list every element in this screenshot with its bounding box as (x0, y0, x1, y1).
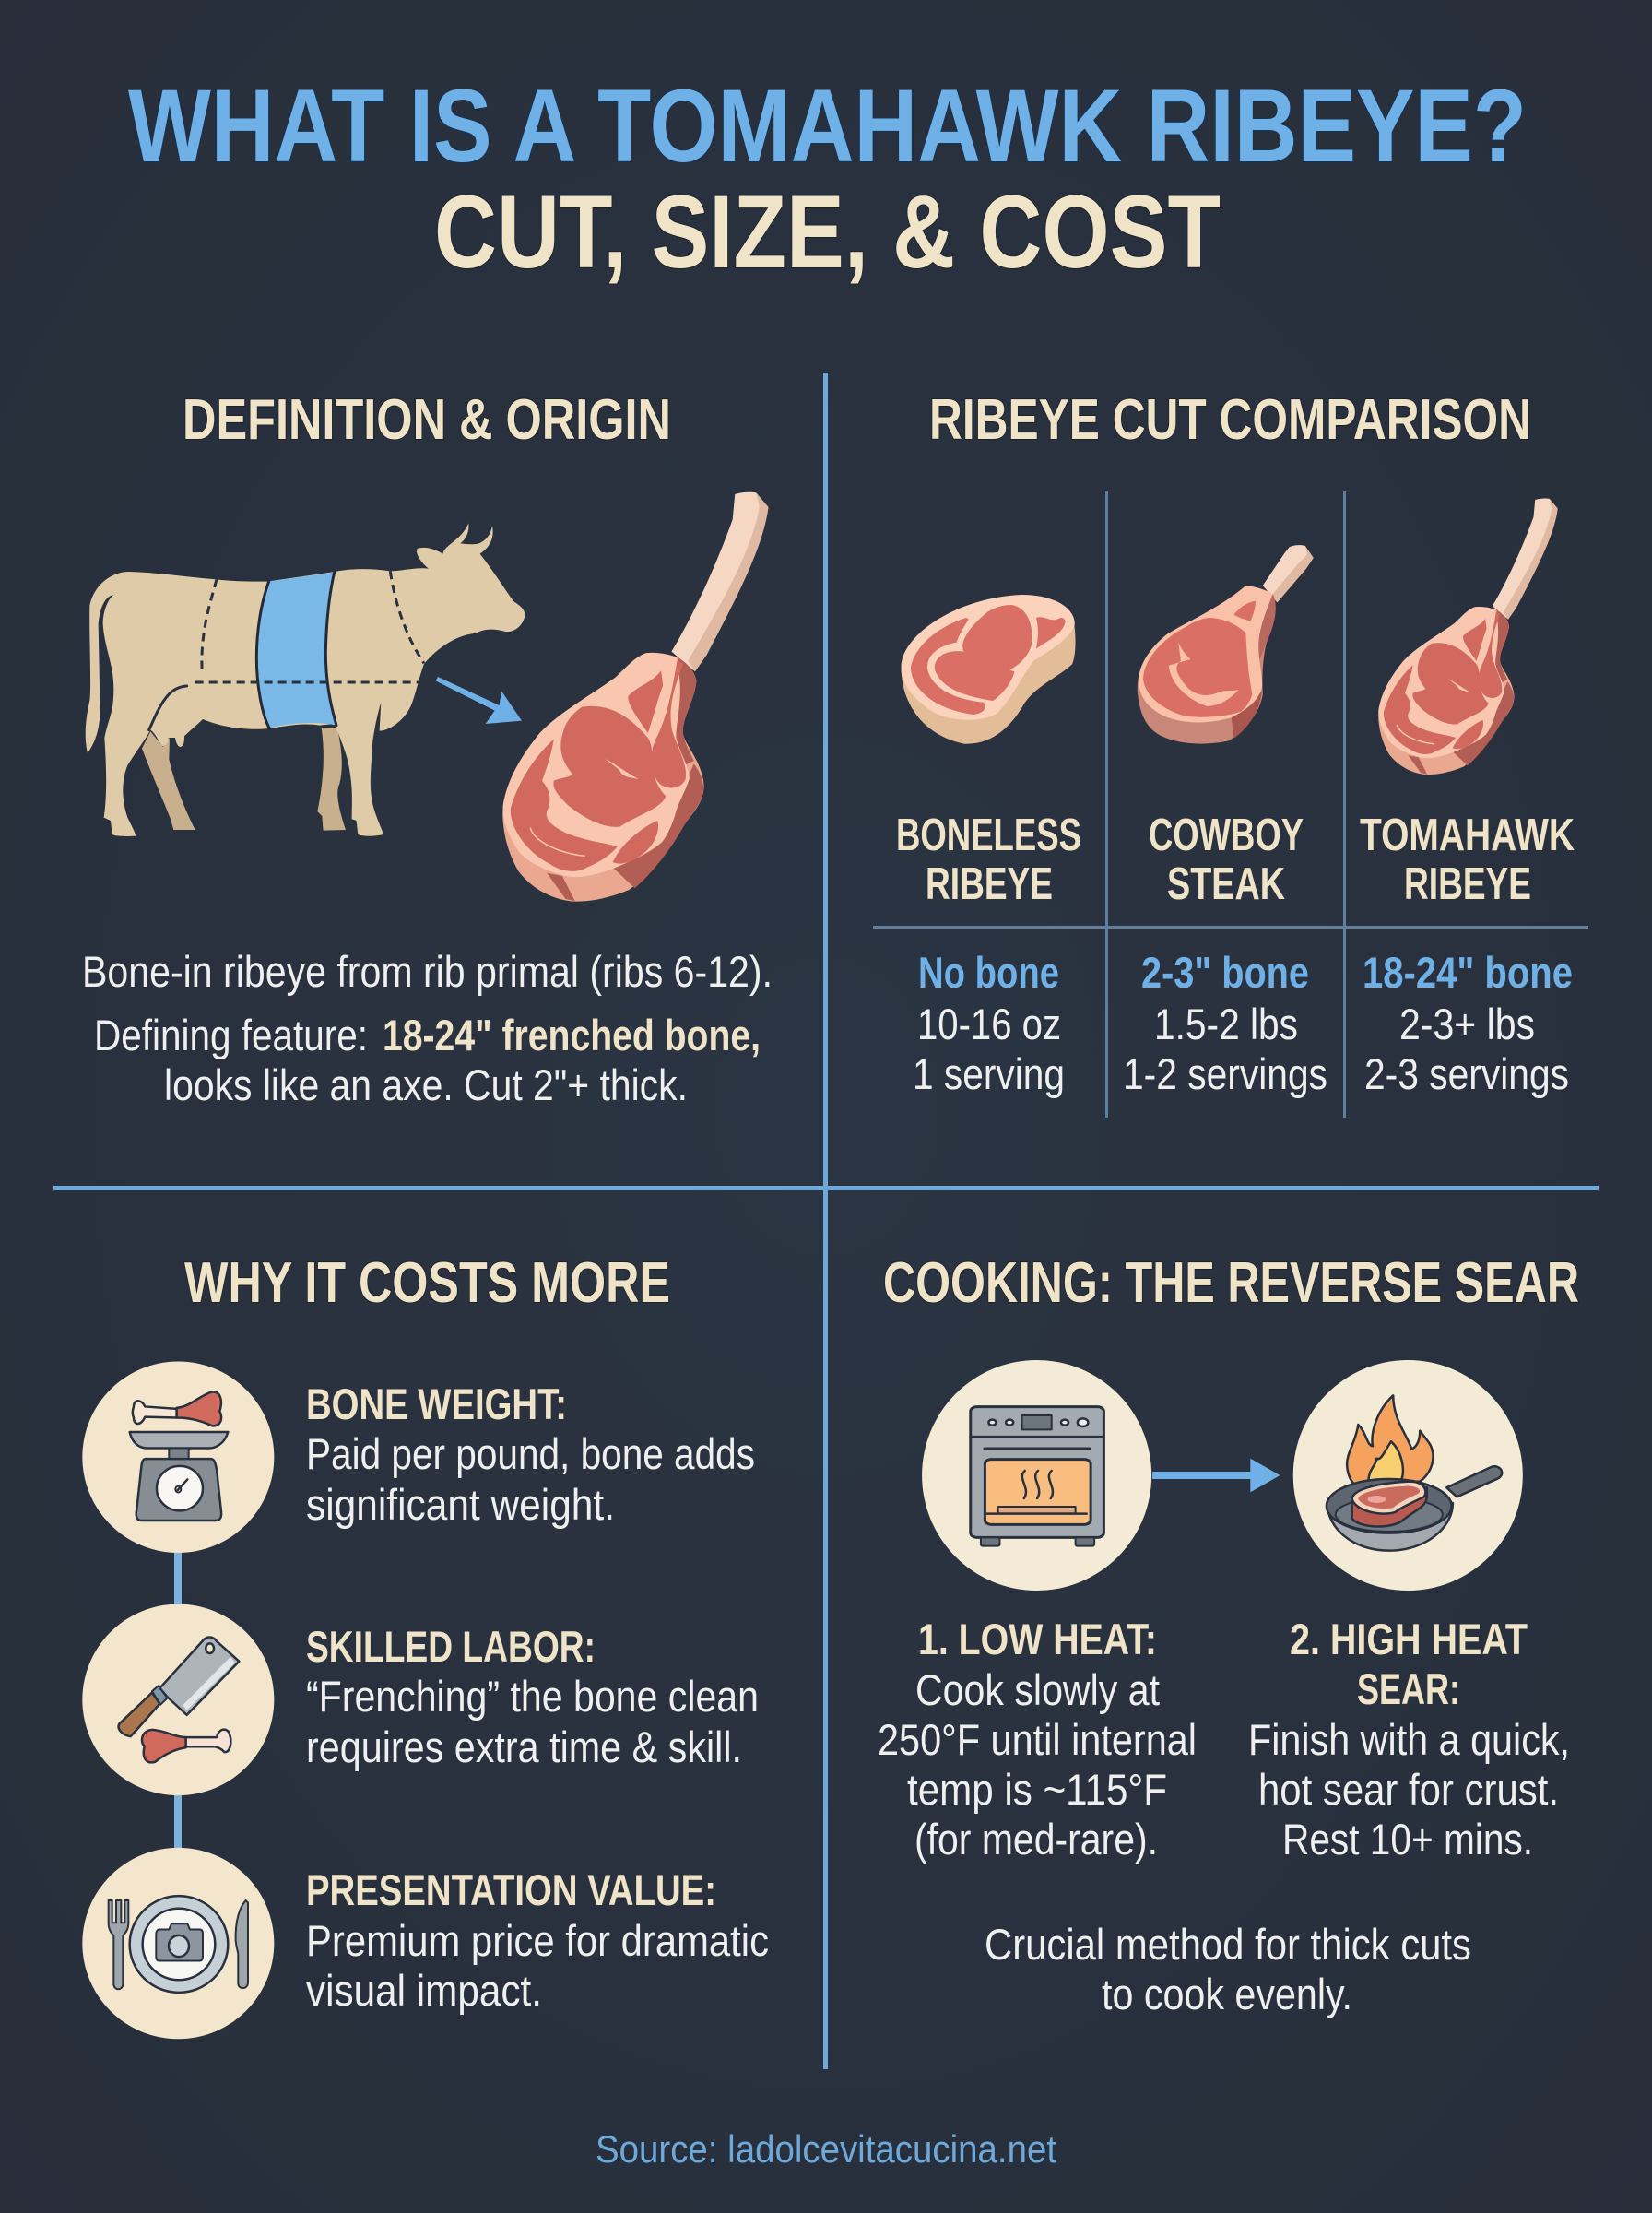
icon: tomahawk steak (502, 492, 768, 902)
step 1: low heat: (for med-rare). (914, 1815, 1158, 1864)
title (128, 68, 1527, 290)
icon: tomahawk ribeye (1378, 498, 1558, 775)
item: bone weight: BONE WEIGHT: (306, 1379, 567, 1428)
icon: bone on scale (82, 1361, 274, 1553)
arrow: cow to steak (436, 677, 522, 724)
icon: cleaver and bone (82, 1604, 274, 1795)
item: skilled labor (306, 1622, 759, 1771)
item: skilled labor: SKILLED LABOR: (306, 1622, 596, 1671)
heading: definition and origin: DEFINITION & ORIGIN (183, 388, 671, 452)
step 1: low heat: Cook slowly at (915, 1665, 1160, 1714)
icon: plate with camera and cutlery (82, 1848, 274, 2039)
column: boneless ribeye (896, 811, 1081, 1098)
title: CUT, SIZE, & COST (434, 174, 1221, 290)
step 2: high heat sear: Finish with a quick, (1248, 1715, 1570, 1764)
heading: why it costs more: WHY IT COSTS MORE (184, 1251, 670, 1315)
column: tomahawk ribeye: TOMAHAWK (1360, 811, 1575, 860)
definition text: 18-24" frenched bone, (383, 1011, 761, 1059)
item: presentation value: Premium price for dramatic (306, 1916, 769, 1965)
item: bone weight: significant weight. (306, 1480, 615, 1529)
column: tomahawk ribeye (1360, 811, 1575, 1098)
item: presentation value (306, 1865, 769, 2015)
column: cowboy steak: 1.5-2 lbs (1154, 1000, 1298, 1048)
icon: boneless ribeye (902, 595, 1076, 744)
panel: ribeye cut comparison (873, 388, 1588, 1118)
column: cowboy steak: STEAK (1167, 859, 1285, 909)
column: tomahawk ribeye: RIBEYE (1404, 859, 1531, 909)
icon: cowboy steak (1138, 545, 1314, 744)
icon: steak in flaming pan (1293, 1360, 1523, 1591)
column: cowboy steak: COWBOY (1149, 811, 1304, 860)
step 2: high heat sear: SEAR: (1357, 1664, 1460, 1713)
step 1: low heat: 1. LOW HEAT: (918, 1615, 1157, 1663)
step 1: low heat (878, 1615, 1197, 1864)
column: tomahawk ribeye: 2-3+ lbs (1399, 1000, 1535, 1048)
item: bone weight (306, 1379, 755, 1529)
step 2: high heat sear: 2. HIGH HEAT (1290, 1615, 1528, 1663)
column: boneless ribeye: No bone (918, 948, 1059, 997)
panel: why it costs more (82, 1251, 769, 2039)
definition text (82, 947, 773, 1109)
column: boneless ribeye: 10-16 oz (917, 1000, 1061, 1048)
source footer: Source: ladolcevitacucina.net (596, 2127, 1056, 2171)
panel: definition and origin (82, 388, 773, 1109)
definition text: Defining feature: (94, 1011, 368, 1059)
step 1: low heat: temp is ~115°F (907, 1765, 1167, 1814)
note: crucial method: Crucial method for thick cuts (985, 1920, 1471, 1969)
item: bone weight: Paid per pound, bone adds (306, 1429, 755, 1478)
arrow: oven to pan (1152, 1459, 1280, 1492)
item: skilled labor: “Frenching” the bone clean (306, 1672, 759, 1721)
step 1: low heat: 250°F until internal (878, 1715, 1197, 1764)
column: boneless ribeye: 1 serving (913, 1049, 1065, 1098)
panel: cooking the reverse sear (878, 1251, 1579, 2018)
icon: oven (922, 1360, 1151, 1591)
definition text: Bone-in ribeye from rib primal (ribs 6-12). (82, 947, 773, 996)
column: tomahawk ribeye: 18-24" bone (1363, 948, 1573, 997)
column: tomahawk ribeye: 2-3 servings (1364, 1049, 1569, 1098)
step 2: high heat sear: hot sear for crust. (1258, 1765, 1559, 1814)
column: cowboy steak: 1-2 servings (1123, 1049, 1328, 1098)
column: cowboy steak: 2-3" bone (1141, 948, 1309, 997)
item: presentation value: PRESENTATION VALUE: (306, 1865, 716, 1914)
item: skilled labor: requires extra time & skill. (306, 1722, 742, 1771)
step 2: high heat sear (1248, 1615, 1570, 1864)
item: presentation value: visual impact. (306, 1966, 542, 2015)
column: boneless ribeye: BONELESS (896, 811, 1081, 860)
column: cowboy steak (1123, 811, 1328, 1098)
note: crucial method (985, 1920, 1471, 2018)
column: boneless ribeye: RIBEYE (926, 859, 1053, 909)
note: crucial method: to cook evenly. (1102, 1970, 1352, 2018)
step 2: high heat sear: Rest 10+ mins. (1282, 1815, 1533, 1864)
icon: cow with rib section (86, 523, 525, 836)
definition text: looks like an axe. Cut 2"+ thick. (164, 1060, 688, 1109)
